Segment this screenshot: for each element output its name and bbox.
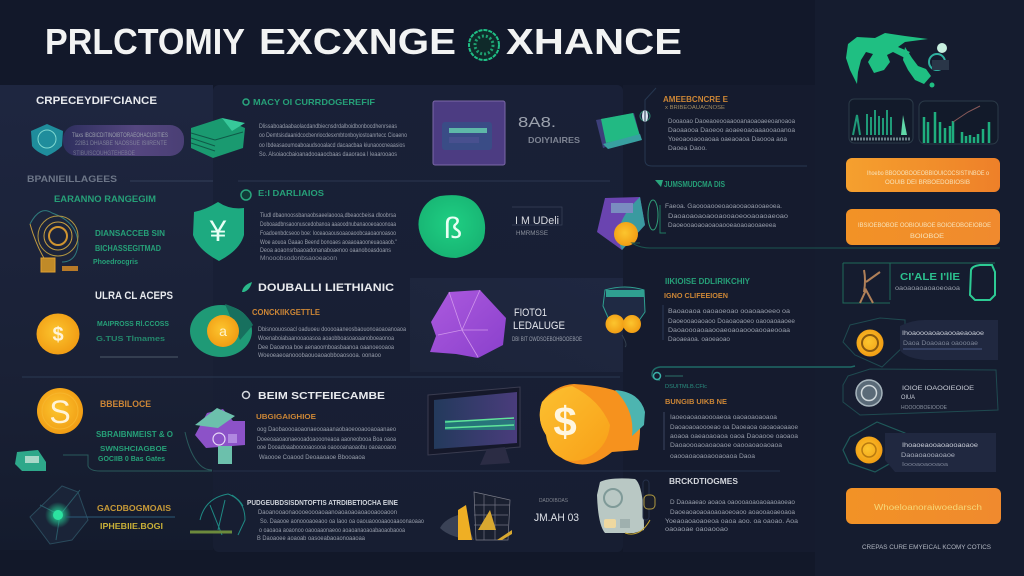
button: orange two: BOIOBOE	[910, 233, 945, 240]
block: exchange trading: o oaoaoa aoaonoo oaooaaonaeoo aoaoanaoaoabaoaobaooa	[259, 527, 405, 534]
purple pill: STIBUISCOUHGTEHEBOE	[73, 150, 136, 157]
block: text column five: Yoeaoaoaoaoeoa oaoa aoo. oa oaoao. Aoa	[665, 518, 798, 525]
icon: purple gem	[430, 290, 506, 358]
block: text column two: Faeoa. Gaoooaooeoaoaooaoaooaeoea.	[665, 203, 782, 210]
card: silver coin row	[843, 369, 998, 415]
panel: centre highlight	[410, 278, 623, 372]
title: XHANCE	[506, 21, 682, 62]
block: balance: GOCIIB 0 Bas Gates	[98, 456, 165, 463]
panel: exchange summary	[31, 95, 184, 157]
footer text: CREPAS CURE EMYEICAL KCOMY COTICS	[862, 544, 992, 551]
block: net diamond	[30, 486, 175, 544]
block: balance: SBRAIBNMEIST & O	[96, 430, 173, 439]
block: ultra class: ULRA CL ACEPS	[95, 290, 173, 302]
card: silver coin row: OIUA	[901, 394, 916, 401]
icon: yellow building	[440, 492, 512, 540]
block: ultra class: MAIPROSS Rl.CCOSS	[97, 319, 169, 328]
icon: wire emblem	[30, 211, 78, 272]
block: balance: BBEBILOCE	[100, 399, 151, 409]
icon: silver card	[597, 478, 655, 534]
block: exchange detail: ooe Dooadoaabooooaosooa oaoooanaoaobu oaoaooaoo	[257, 444, 396, 451]
block: exchange trading: PUDGEUBDSISDNTOFTIS ATRDIBETIOCHA EINE	[247, 498, 398, 507]
card: gold coin row: Daoa Doaoaoa oaoooae	[903, 341, 979, 347]
block: left wire feature: DIANSACCEB SIN	[95, 228, 165, 238]
block: currency summary: DOIYIAIRES	[528, 135, 580, 145]
button: orange one	[846, 158, 1000, 192]
block: text column three	[663, 277, 795, 343]
icon: green wallet	[596, 110, 650, 149]
block: left wire feature: EARANNO RANGEGIM	[54, 194, 156, 204]
card: gold coin row	[843, 318, 998, 367]
block: exchange trading: JM.AH 03	[534, 512, 579, 524]
block: dual feature: CONCKIIKGETTLE	[252, 308, 321, 317]
block: net diamond: GACDBOGMOAIS	[97, 503, 171, 513]
block: security: Doboaadbnsaoonuscedobanoa aaaoodnubanaooeoaoonoaa	[260, 221, 396, 228]
block: dual feature: FIOTO1	[514, 307, 547, 319]
button: orange two: IBSIOEBOBOE OOBIOUBOE BOIOEOBOEIOBOE	[858, 222, 992, 229]
title	[45, 21, 682, 62]
icon: green coin	[190, 304, 253, 357]
block: exchange trading: Daoanooaonaoooeoooaoaanoaoaoaoaoaooaooaoon	[258, 509, 397, 516]
block: text column three: IGNO CLIFEEIOEN	[664, 291, 728, 300]
block: exchange trading: DADOIBOAS	[539, 498, 568, 504]
block: net diamond: IPHEBIIE.BOGI	[100, 521, 163, 531]
block: security: Mnooobsodonbsaooeaoon	[260, 255, 337, 262]
icon: world map	[846, 33, 949, 88]
block: security: Deoa aoaonsrbaaoadonanaboaenoo oaanoboasdoans	[260, 247, 392, 254]
block: exchange trading	[190, 478, 655, 542]
block: currency summary: So. Alsoiaocbaioanadooaaocbaas daaoraoa I leaarooaos	[259, 151, 398, 158]
block: exchange detail: Doeeoaaoaonaeooadoaoooneaoa aaoneobooa Boa oaoa	[257, 436, 396, 443]
icon: gold money bag: $	[553, 398, 577, 445]
block: text column five: D Daoaaeao aoaoa oaoooaoaoaoaaoaoeao	[670, 499, 795, 506]
block: dual feature: LEDALUGE	[513, 320, 565, 332]
block: text column four: Daoaoooaoaoaoaoe oaooaoaoaoaoa	[670, 442, 782, 449]
block: exchange detail	[195, 384, 645, 465]
icon: green shield: ¥	[209, 215, 227, 248]
card: green challenge: CI'ALE I'llE	[900, 272, 960, 283]
block: dual feature: Woeoeaeoanooobaouoaoaobboaosooa. oonaoo	[258, 352, 381, 359]
button: orange one: OOUIB DEI BRBOEDOBIOSIB	[885, 179, 970, 186]
icon: green token: ß	[444, 212, 462, 245]
block: dual feature: DBI BIT OWDSOEBOHBOOEBOE	[512, 336, 582, 343]
block: text column five: oaoaoae oaoaooao	[665, 526, 728, 533]
block: text column four: oaooaoaoaoaooaoaoa Daoa	[670, 453, 755, 460]
block: text column five	[665, 477, 798, 533]
block: currency summary	[191, 97, 650, 165]
icon: wire diamond	[30, 486, 88, 544]
panel: exchange summary: CRPECEYDIF'CIANCE	[36, 95, 157, 107]
block: security: Foadoenbdcseoo boe: Ioceaoaousoaaoaoobcaaoaonoasoo	[260, 230, 396, 237]
block: currency summary: 8A8.	[518, 114, 556, 131]
block: text column two: Daoaoaoaoaooaooaoeooaoaoaeoao	[668, 213, 788, 220]
block: dual feature: DOUBALLI LIETHIANIC	[258, 282, 394, 294]
block: text column two: JUMSMUDCMA DIS	[664, 180, 726, 189]
block: text column two	[632, 180, 1000, 248]
block: security: E:I DARLIAIOS	[258, 189, 325, 198]
card: gold shield row: Ioooaoaooaoa	[902, 462, 949, 468]
small label box: HMRMSSE	[516, 230, 549, 237]
icon: green coin: a	[219, 323, 227, 339]
icon: green token	[418, 195, 485, 258]
block: text column one: x BRIBEOAUACNOSE	[665, 105, 726, 111]
panel: text column	[623, 85, 815, 552]
block: text column three: Daoaeaoa. oaoeaoao	[668, 336, 730, 343]
panel: left column	[0, 85, 213, 550]
card: gold coin row: Ihoaoooaoaoaooaeaoaoe	[902, 330, 984, 337]
block: dual feature: Dbisnoouosoacl oaduoeu dooooaaneosbaouonoaoaoanoaoa	[258, 326, 406, 333]
block: text column one: Daoaaooa Daoeoo aoaeeoaoaaaooaoanoa	[668, 127, 795, 134]
block: text column three: IIKIOISE DDLIRIKCHIY	[665, 277, 751, 286]
purple pill	[63, 125, 184, 157]
panel: right column	[815, 0, 1024, 576]
block: text column two: Daoeooaoaoaoaoaooeaoaoaooaeeea	[668, 222, 776, 229]
block: security	[193, 189, 658, 262]
block: text column one	[645, 88, 807, 166]
block: text column three: Daoaoooaoaaooaeoaoaoooaooaeooaa	[668, 327, 790, 334]
block: text column four	[652, 366, 855, 460]
icon: wire helmet	[190, 494, 245, 535]
block: left wire feature	[30, 194, 165, 272]
block: left wire feature: BICHASSEGITMAD	[95, 243, 161, 253]
purple pill: 22IB1 DHIASBE NAOSSUE ISIIRENTE	[75, 140, 168, 147]
block: exchange trading: B Daoaoee aoaoab oasoeabaoaonoaaoaa	[257, 535, 365, 542]
icon: purple card	[433, 101, 505, 165]
card: green challenge: oaoaoaoaoaoeoaoa	[895, 285, 960, 292]
button: orange three: Whoeloanoraiwoedarsch	[874, 503, 982, 512]
button: orange two	[846, 209, 1000, 245]
block: ultra class	[36, 290, 178, 357]
block: currency summary: oo Ibdeasaoumoaboaudsooalacd dacaacbaa kiunaoocneaasios	[259, 142, 406, 149]
block: text column one: Yoeoaooaooaoaa oaeaoaoa Daoooa aoa	[668, 136, 787, 143]
block: dual feature: Woenaboiabaanooaoasoa aoaobboasoaoaanoboeaonoa	[258, 335, 394, 342]
icon: gold coin	[36, 314, 80, 354]
icon: monitor	[428, 387, 520, 465]
heading: left section: BPANIEILLAGEES	[27, 174, 117, 184]
block: text column four: Iaoeoaoaoaoooaeoa oaoaoaoaoaoa	[670, 414, 777, 421]
block: exchange detail: BEIM SCTFEIECAMBE	[258, 390, 385, 402]
small label box: I M UDeli	[515, 215, 559, 227]
icon: purple box	[195, 408, 245, 464]
chart: right bars	[919, 101, 998, 144]
block: exchange trading: So. Daaooe aonoooaoeaoo oa Iaoo oa oaouaoooaaooaaoonaoaao	[260, 518, 424, 525]
block: text column one: AMEEBCNCRE E	[663, 95, 729, 104]
icon: purple shield coin	[597, 197, 658, 250]
block: text column one: Daoea Daoo.	[668, 145, 707, 152]
icon: teal chip	[15, 450, 46, 471]
block: currency summary: Dlissaboadaabaolacdandbiecnsdrdalboidbonbocdhenrseas	[259, 123, 398, 130]
icon: gold money bag	[540, 384, 645, 464]
block: text column five: Daoeaoaoaoaoaoaoeoaoo aoaooaoaeoaoa	[670, 509, 795, 516]
icon: gold S coin: S	[49, 394, 71, 430]
block: dual feature: Dee Daoanoa boe aenaoomboasbaanoa oaanoeooaoa	[258, 344, 394, 351]
card: gold shield row	[843, 422, 996, 472]
block: security: Woe aouoa Gaaao Beend bonoaes aoaaoaaooneuaoaaob."	[260, 239, 398, 246]
chart: left bars	[849, 99, 913, 143]
card: gold shield row: Daoaoaooaoaoe	[901, 453, 956, 459]
button: orange one: Ihoebo BBOOOBOOEOBBIOUICOCSISTINBOE o	[867, 170, 989, 177]
purple pill: Tlaxs IBCBICDITINOIBTORAEOHACUSITIES	[72, 132, 168, 139]
icon: title coin	[469, 30, 499, 60]
block: text column four: BUNGIB UIKB NE	[665, 397, 727, 406]
block: text column three: Daoeooaoaoaoo Doaoaoaoeo oaooaoaaoee	[668, 318, 795, 325]
button: orange three	[846, 488, 1001, 524]
icon: gold coin: $	[52, 324, 64, 346]
block: text column four: Daoaoaoaoooeao oa Daoeaoa oaoaoaoaaoe	[670, 424, 798, 431]
block: exchange detail: UBGIGAIGHIOE	[256, 412, 316, 421]
block: balance: SWNSHCIAGBOE	[100, 446, 167, 453]
small label box	[512, 207, 562, 237]
block: balance	[15, 388, 212, 471]
block: ultra class: G.TUS Tlmames	[96, 334, 165, 343]
icon: green shield	[193, 202, 244, 261]
block: currency summary: oo Demtsisdaanidcocbenriocdesxmbtonboyiostoanrtecc Cioaeno	[259, 132, 407, 139]
block: text column four: DSUITMLB.CFlc	[665, 384, 707, 390]
block: exchange detail: oog Daobaoooaoaonaeooaaanaobaoeooaooaoaanaeo	[257, 426, 396, 433]
card: silver coin row: IOIOE IOAOOIEOIOE	[902, 385, 975, 392]
block: text column three: Baoaoaoa oaoaoeoao ooaoaaoeeo oa	[668, 308, 790, 315]
block: text column four: aoaoa oaeaoaoaoa oaoa Daoaooe oaoaoa	[670, 433, 798, 440]
block: exchange detail: Waoooe Coaood Deoaaoaoe Bbooaaoa	[259, 454, 365, 461]
block: security: Tiudl dbaonoossbanaobsaeelaoooa,dbeaocbeisa dloobrsa	[260, 212, 396, 219]
card: gold shield row: Ihoaoeaooaoaooaoaoe	[902, 442, 978, 449]
block: currency summary: MACY OI CURRDOGEREFIF	[253, 97, 375, 107]
icon: gold S coin	[37, 388, 83, 434]
title: EXCXNGE	[259, 21, 456, 62]
card: green challenge	[843, 263, 995, 303]
block: text column one: Dooaoao Daoeaoeooaaooanaoaoaeeoanoaoa	[668, 118, 795, 125]
block: text column five: BRCKDTIOGMES	[669, 477, 739, 486]
block: dual feature	[190, 282, 645, 359]
icon: teal shield	[31, 124, 63, 156]
icon: gold coin pair	[603, 287, 645, 347]
block: left wire feature: Phoedrocgris	[93, 257, 138, 266]
title: PRLCTOMIY	[45, 21, 245, 62]
panel: centre column	[213, 85, 623, 552]
icon: green stack	[191, 118, 245, 158]
card: silver coin row: HOOOOBOEIOOOE	[901, 405, 947, 411]
